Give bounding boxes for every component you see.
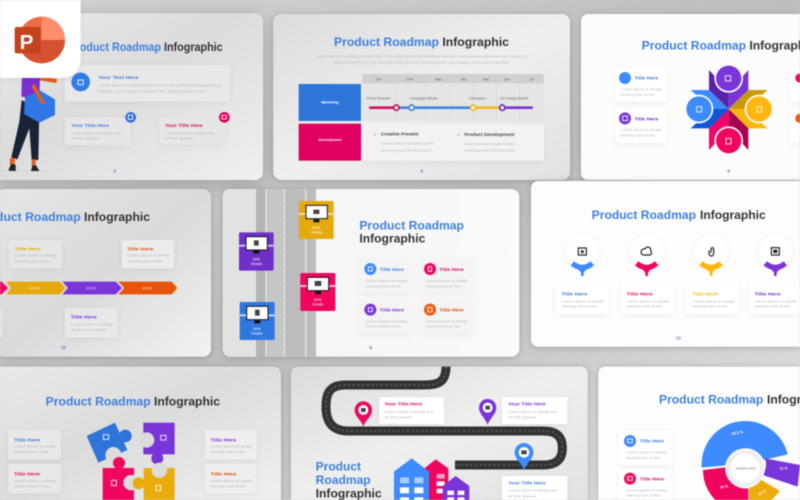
icon pin: purple <box>759 235 792 276</box>
icon: PowerPoint mark: P <box>20 31 34 54</box>
monitor card: yellow: 50% <box>313 226 321 230</box>
check: creative present: Lorem Ipsum simply to print <box>381 142 433 146</box>
card: orange: dummy text of the <box>128 259 163 263</box>
radial arrow diagram <box>685 64 773 155</box>
card: blue: Your Title Here <box>508 480 546 486</box>
card: blue: Lorem Ipsum is simply <box>626 451 667 455</box>
panel: slide 9 road with monitors <box>223 189 519 357</box>
slide 6 page number: 6 <box>727 169 730 174</box>
check: creative present <box>373 132 433 152</box>
card: purple right: Lorem Ipsum is simply <box>210 445 253 449</box>
cards: right cropped <box>790 68 800 143</box>
card: purple: dummy text of the <box>755 305 790 309</box>
row: marketing label: Marketing <box>321 101 339 105</box>
card: yellow: Title Here <box>15 246 41 252</box>
arrow timeline <box>0 282 177 294</box>
card: your text here: Lorem Ipsum is simply dummy text of the printing and typesetting <box>98 83 221 87</box>
donut chart: 21 % <box>758 489 767 497</box>
card: orange: dummy text of the <box>425 325 460 329</box>
slide 5 subtitle: standard dummy text ever since the 1500s when an unknown printer took a galley. Lorem Ipsum has been <box>333 61 509 65</box>
card: pink title: Lorem Ipsum is simply text <box>165 131 214 135</box>
card: pink <box>379 397 444 424</box>
card: blue <box>8 430 61 459</box>
slide 3 title: Product Roadmap <box>68 40 161 54</box>
card: pink: Title Here <box>640 476 664 482</box>
slide 5 title: Infographic <box>442 35 509 49</box>
check: product development: Product Development <box>464 132 515 137</box>
road slide title: Product <box>316 460 361 474</box>
panel: slide puzzle <box>0 367 281 500</box>
card: purple: Your Title Here <box>508 402 546 408</box>
card: blue: Title Here <box>640 439 664 445</box>
card: purple: dummy text of the <box>366 325 401 329</box>
card: blue title: dummy text of the <box>621 93 655 97</box>
card: pink: Title Here <box>627 292 653 298</box>
row: development label <box>299 124 361 161</box>
slide 10 title: Infographic <box>84 210 150 224</box>
donut chart: 69.2 % <box>731 430 744 436</box>
slide 13 title <box>592 208 766 222</box>
slide 9 title: Product Roadmap <box>359 218 464 232</box>
card: blue: Lorem Ipsum is simply <box>562 299 604 303</box>
card: blue: Title Here <box>380 267 404 273</box>
timeline with milestones: Campaign Media <box>410 97 438 101</box>
panel: slide 13 pins <box>531 181 800 347</box>
slide 9 page number: 9 <box>369 345 372 350</box>
check: creative present: ✓ <box>373 132 377 137</box>
slide 13 page number: 13 <box>676 336 681 341</box>
card: purple: Title Here <box>755 292 781 298</box>
card: blue: Lorem Ipsum is simply <box>14 445 56 449</box>
road slide title: Roadmap <box>316 473 371 487</box>
monitor card: blue: 64% <box>253 327 261 331</box>
donut slide title: Product Roadmap <box>659 392 763 406</box>
timeline with milestones: Education <box>469 97 485 101</box>
check: product development: ✓ <box>457 132 460 137</box>
icon pin: pink <box>630 235 663 276</box>
table: month header: Feb <box>407 77 413 81</box>
card: purple: Title Here <box>380 308 404 314</box>
card: pink: Lorem Ipsum is simply text <box>384 410 433 414</box>
monitor card: yellow: Details <box>311 231 322 235</box>
card: blue <box>359 259 412 292</box>
card: blue: Lorem Ipsum is simply <box>366 279 408 283</box>
monitor card: blue <box>240 302 275 340</box>
panel: slide donut chart <box>598 367 800 500</box>
card: pink: Lorem Ipsum is simply <box>425 279 467 283</box>
card: pink: dummy text of the <box>425 284 460 288</box>
card: yellow: dummy text of the <box>692 305 728 309</box>
card: yellow: dummy text of the <box>15 259 50 263</box>
card: blue title: Your Title Here <box>71 123 109 129</box>
card: purple title: dummy text of the <box>621 134 655 138</box>
check: product development <box>457 132 515 153</box>
card: blue title: Title Here <box>634 76 659 82</box>
card: blue: dummy text of the <box>366 284 401 288</box>
timeline with milestones: On Going Market <box>500 97 528 101</box>
icon pin: blue <box>566 235 599 276</box>
donut chart: Details here <box>736 467 756 471</box>
card: orange right: Lorem Ipsum is simply <box>210 479 253 483</box>
table: month header <box>362 74 544 83</box>
slide 3 title <box>68 40 223 54</box>
table: month header: Mei <box>483 77 489 81</box>
card: blue: dummy text of the <box>14 450 49 454</box>
card: orange right: dummy text of the <box>210 484 246 488</box>
monitor card: pink <box>300 273 335 311</box>
panel: slide 5 timeline table <box>273 14 570 180</box>
card: pink: dummy text of the <box>626 494 660 498</box>
monitor card: pink: Details <box>312 303 323 307</box>
table: month header: Jun <box>504 77 510 81</box>
card: blue title: Lorem Ipsum is simply text <box>71 131 121 135</box>
card: purple right: dummy text of the <box>210 450 246 454</box>
slide 6 title <box>642 38 800 52</box>
card: pink: Title Here <box>439 267 464 273</box>
card: purple: dummy text of the <box>71 328 106 332</box>
card: blue title <box>65 112 136 145</box>
check: product development: Lorem Ipsum simply to print <box>464 142 515 146</box>
card: purple title: Title Here <box>634 116 659 122</box>
card: pink: Lorem Ipsum is simply <box>626 488 667 492</box>
slide 5 title <box>334 35 509 49</box>
card: purple <box>65 308 117 338</box>
puzzle title: Infographic <box>154 394 220 408</box>
arrow timeline: 2020 <box>86 287 96 291</box>
slide 5 subtitle <box>317 54 527 65</box>
donut chart: 40 % <box>720 484 729 490</box>
monitor card: pink: 80% <box>314 298 322 302</box>
slide 9 title <box>359 218 464 245</box>
table: body <box>362 84 544 161</box>
card: purple: Title Here <box>71 315 97 321</box>
card: cropped left <box>0 308 3 338</box>
monitor card: yellow <box>299 201 334 239</box>
card: purple: Lorem Ipsum is simply <box>755 299 797 303</box>
monitor card: purple: 34% <box>253 257 261 261</box>
card: purple title: Lorem Ipsum is simply <box>621 128 662 132</box>
card: blue <box>502 476 567 500</box>
card: pink title <box>159 112 230 145</box>
card: your text here: Your Text Here <box>98 75 139 81</box>
card: orange: Lorem Ipsum is simply <box>425 319 467 323</box>
card: blue: Title Here <box>561 292 588 298</box>
card: pink: dummy text of the <box>14 484 49 488</box>
card: orange: Title Here <box>127 246 154 252</box>
card: yellow: Title Here <box>692 292 718 298</box>
monitor card: blue: Details <box>251 332 263 336</box>
card: purple: of the ipsum <box>508 416 536 420</box>
panel: slide 6 radial diagram <box>581 14 800 180</box>
card: orange <box>122 240 174 268</box>
road background <box>223 189 316 357</box>
table: month header: Jul <box>529 77 534 81</box>
icon pin: yellow <box>694 235 728 276</box>
card: pink: Title Here <box>14 472 40 478</box>
card: purple <box>749 285 800 314</box>
check: creative present: Creative Present <box>381 132 419 137</box>
card: yellow: Lorem Ipsum is simply <box>692 299 735 303</box>
card: pink: dummy text of the <box>627 305 662 309</box>
card: blue title: of the ipsum <box>71 137 100 141</box>
slide 10 page number: 10 <box>61 345 66 350</box>
table: month header: Jan <box>375 77 381 81</box>
slide 13 title: Product Roadmap <box>592 208 696 222</box>
road slide title: Infographic <box>316 486 382 500</box>
card: blue: dummy text of the <box>562 305 597 309</box>
card: purple <box>502 397 567 424</box>
card: orange: Title Here <box>439 308 464 314</box>
card: your text here <box>65 65 230 102</box>
donut chart: 11 % <box>780 467 788 471</box>
card: orange right <box>205 464 257 493</box>
card: yellow <box>9 240 62 268</box>
card: orange right: Title Here <box>210 472 237 478</box>
card: purple title <box>615 109 667 143</box>
card: yellow <box>686 285 739 314</box>
card: blue title: Lorem Ipsum is simply <box>621 88 662 92</box>
timeline with milestones: Press Release <box>367 97 391 101</box>
road slide title <box>316 460 382 500</box>
card: purple right: Title Here <box>210 437 237 443</box>
donut chart <box>702 421 800 500</box>
puzzle graphic <box>87 423 175 500</box>
slide 6 title: Product Roadmap <box>642 38 746 52</box>
row: development label: Development <box>319 138 342 142</box>
card: blue: Lorem Ipsum is simply text <box>508 489 557 493</box>
arrow timeline: 2018 <box>30 287 40 291</box>
card: pink <box>8 464 61 493</box>
panel: slide 3 person <box>0 13 263 180</box>
puzzle title: Product Roadmap <box>46 394 151 408</box>
pin: pink <box>355 401 372 427</box>
arrow timeline: 2022 <box>142 287 152 291</box>
slide 5 title: Product Roadmap <box>334 35 439 49</box>
card: purple: Lorem Ipsum is simply text <box>508 410 557 414</box>
card: orange: Lorem Ipsum is simply <box>128 254 170 258</box>
pin: purple <box>479 399 496 425</box>
slide 5 page number: 5 <box>420 169 423 174</box>
card: blue <box>556 285 608 314</box>
pin: blue <box>515 443 533 470</box>
card: blue title <box>615 68 667 102</box>
check: product development: dummy text dummy text <box>464 149 514 153</box>
row: marketing label <box>299 84 361 121</box>
slide 3 title: Infographic <box>164 40 223 54</box>
card: pink: Lorem Ipsum is simply <box>14 479 56 483</box>
card: blue: dummy text of the <box>626 456 660 460</box>
card: blue <box>619 431 672 465</box>
illustration: person holding hexagon <box>0 77 57 171</box>
slide 3 page number: 3 <box>113 169 116 174</box>
card: pink <box>419 259 472 292</box>
card: pink: Lorem Ipsum is simply <box>627 299 669 303</box>
table: month header: Mar <box>435 77 442 81</box>
panel: slide 10 arrows <box>0 189 211 357</box>
table: month header: Apr <box>461 77 467 81</box>
slide 10 title <box>0 210 150 224</box>
card: purple <box>359 300 412 333</box>
slide 13 title: Infographic <box>700 208 766 222</box>
timeline with milestones <box>367 97 532 110</box>
card: blue: Title Here <box>14 437 40 443</box>
card: yellow: Lorem Ipsum is simply <box>15 254 57 258</box>
card: blue: of the ipsum <box>508 494 536 498</box>
monitor card: purple: Details <box>251 262 262 266</box>
card: pink: of the ipsum <box>384 416 413 420</box>
card: pink: Your Title Here <box>384 402 422 408</box>
card: pink <box>621 285 674 314</box>
check: creative present: dummy text dummy text <box>381 148 431 152</box>
card: your text here: industry. Lorem Ipsum has been the simply dummy text of <box>98 90 208 94</box>
winding road <box>326 367 562 465</box>
card: purple right <box>205 430 257 459</box>
slide 5 subtitle: Lorem Ipsum is simply dummy text of the printing and typesetting industry. Lorem Ipsum has been the industry's <box>317 54 527 58</box>
slide 9 title: Infographic <box>359 231 426 245</box>
card: pink title: Your Title Here <box>165 123 203 129</box>
card: orange <box>419 300 472 333</box>
panel: slide winding road <box>291 367 588 500</box>
illustration: buildings <box>394 458 469 500</box>
logo: PowerPoint badge <box>0 0 81 78</box>
card: pink title: of the ipsum <box>165 137 194 141</box>
card: pink <box>619 469 672 500</box>
card: purple: Lorem Ipsum is simply <box>71 322 113 326</box>
card: purple: Lorem Ipsum is simply <box>366 319 408 323</box>
monitor card: purple <box>239 232 274 271</box>
puzzle title <box>46 394 220 408</box>
